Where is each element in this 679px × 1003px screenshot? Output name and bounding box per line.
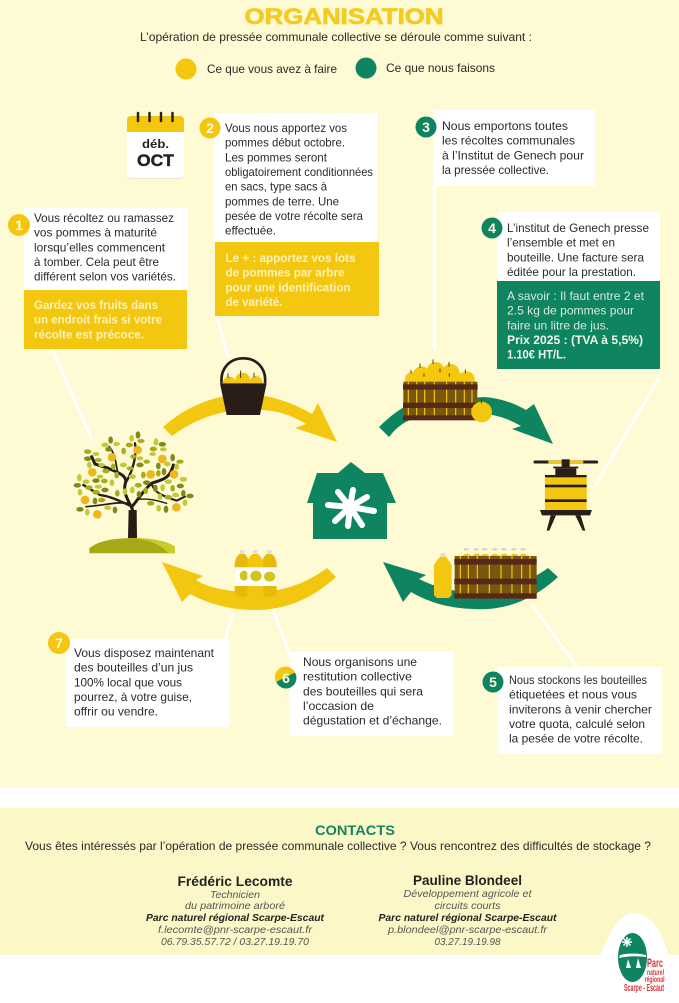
panel: step 2: de variété. bbox=[226, 295, 282, 309]
panel: step 5: étiquetées et nous vous bbox=[509, 688, 637, 702]
panel: step 1: 1 bbox=[15, 217, 23, 233]
panel: step 6 bbox=[275, 652, 453, 736]
panel: step 7 bbox=[48, 632, 229, 727]
contact: Frédéric Lecomte: du patrimoine arboré bbox=[185, 900, 285, 912]
arrow: green top right bbox=[379, 397, 553, 444]
icon: crate of bottles bbox=[434, 549, 537, 599]
panel: step 4: l’ensemble et met en bbox=[507, 236, 615, 250]
contact: Pauline Blondeel bbox=[378, 872, 557, 948]
panel: step 2: effectuée. bbox=[225, 224, 276, 238]
calendar icon bbox=[127, 113, 184, 179]
panel: step 2: pesée de votre récolte sera bbox=[225, 209, 363, 223]
panel: step 5: inviterons à venir chercher bbox=[509, 702, 652, 716]
logo: Parc naturel régional Scarpe-Escaut: régional bbox=[644, 975, 664, 984]
title: ORGANISATION bbox=[244, 4, 444, 29]
panel: step 4: faire un litre de jus. bbox=[507, 318, 609, 332]
icon: apple tree bbox=[74, 431, 194, 553]
contact: Frédéric Lecomte: 06.79.35.57.72 / 03.27.19.19.70 bbox=[161, 936, 309, 948]
panel: step 2: obligatoirement conditionnées bbox=[225, 165, 373, 179]
arrow: yellow top left bbox=[163, 396, 337, 442]
panel: step 4: A savoir : Il faut entre 2 et bbox=[507, 289, 645, 303]
panel: step 5: votre quota, calculé selon bbox=[509, 717, 645, 731]
icon: crate of apples bbox=[403, 359, 492, 422]
panel: step 7: des bouteilles d’un jus bbox=[74, 661, 193, 675]
logo: Parc naturel régional Scarpe-Escaut bbox=[600, 913, 669, 994]
panel: step 2: pommes début octobre. bbox=[225, 136, 345, 150]
panel: step 7: 100% local que vous bbox=[74, 675, 182, 689]
panel: step 7: Vous disposez maintenant bbox=[74, 646, 215, 660]
panel: step 7: offrir ou vendre. bbox=[74, 705, 158, 719]
contact: Frédéric Lecomte: Parc naturel régional Scarpe-Escaut bbox=[146, 912, 324, 924]
panel: step 4: Prix 2025 : (TVA à 5,5%) bbox=[507, 333, 643, 347]
panel: step 3 bbox=[416, 110, 595, 186]
panel: step 2: Vous nous apportez vos bbox=[225, 121, 347, 135]
contact: Frédéric Lecomte bbox=[146, 873, 324, 948]
contact: Frédéric Lecomte: Technicien bbox=[210, 889, 260, 901]
panel: step 6: 6 bbox=[282, 670, 290, 686]
panel: step 5: la pesée de votre récolte. bbox=[509, 732, 643, 746]
panel: step 6: dégustation et d’échange. bbox=[303, 714, 442, 728]
panel: step 4: éditée pour la prestation. bbox=[507, 265, 636, 279]
panel: step 4: L’institut de Genech presse bbox=[507, 221, 649, 235]
panel: step 6: l’occasion de bbox=[303, 699, 374, 713]
panel: step 1: lorsqu’elles commencent bbox=[34, 240, 166, 254]
icon: basket of apples bbox=[220, 358, 267, 415]
panel: step 3: 3 bbox=[422, 119, 430, 135]
panel: step 4: 4 bbox=[488, 220, 496, 236]
panel: step 2: pommes de terre. Une bbox=[225, 194, 339, 208]
panel: step 2 bbox=[200, 113, 379, 316]
contact: Frédéric Lecomte: f.lecomte@pnr-scarpe-escaut.fr bbox=[158, 924, 313, 936]
calendar icon: déb. bbox=[142, 137, 169, 151]
contacts heading: CONTACTS bbox=[315, 822, 395, 838]
panel: step 7: pourrez, à votre guise, bbox=[74, 690, 192, 704]
icon: fruit press bbox=[535, 459, 597, 531]
contacts question: Vous êtes intéressés par l’opération de pressée communale collective ? Vous rencontrez des difficultés de stockage ? bbox=[25, 839, 651, 853]
panel: step 3: les récoltes communales bbox=[442, 134, 575, 148]
panel: step 6: des bouteilles qui sera bbox=[303, 684, 423, 698]
panel: step 5 bbox=[482, 667, 662, 754]
contact: Pauline Blondeel: 03.27.19.19.98 bbox=[434, 936, 501, 948]
legend: Ce que nous faisons bbox=[386, 61, 495, 75]
panel: step 2: pour une identification bbox=[226, 280, 350, 294]
panel: step 1: différent selon vos variétés. bbox=[34, 270, 176, 284]
subtitle: L’opération de pressée communale collective se déroule comme suivant : bbox=[140, 30, 532, 44]
contact: Frédéric Lecomte: Frédéric Lecomte bbox=[178, 873, 293, 889]
panel: step 4: bouteille. Une facture sera bbox=[507, 250, 644, 264]
panel: step 1 bbox=[8, 208, 188, 349]
panel: step 5: 5 bbox=[489, 674, 497, 690]
legend bbox=[176, 58, 495, 80]
contact: Pauline Blondeel: circuits courts bbox=[434, 900, 501, 912]
panel: step 7: 7 bbox=[55, 635, 63, 651]
contact: Pauline Blondeel: Pauline Blondeel bbox=[413, 872, 522, 888]
panel: step 1: récolte est précoce. bbox=[34, 327, 144, 341]
panel: step 1: à tomber. Cela peut être bbox=[34, 255, 159, 269]
contact: Pauline Blondeel: p.blondeel@pnr-scarpe-escaut.fr bbox=[387, 924, 548, 936]
panel: step 3: la pressée collective. bbox=[442, 163, 549, 177]
icon: bottles of juice bbox=[235, 550, 277, 597]
logo: Parc naturel régional Scarpe-Escaut: naturel bbox=[647, 968, 664, 977]
panel: step 2: Les pommes seront bbox=[225, 150, 328, 164]
panel: step 4: 2.5 kg de pommes pour bbox=[507, 304, 634, 318]
panel: step 5: Nous stockons les bouteilles bbox=[509, 673, 647, 687]
contact: Pauline Blondeel: Parc naturel régional Scarpe-Escaut bbox=[378, 912, 557, 924]
panel: step 2: 2 bbox=[206, 120, 214, 136]
logo: Parc naturel régional Scarpe-Escaut: Parc bbox=[647, 956, 663, 970]
panel: step 1: Vous récoltez ou ramassez bbox=[34, 211, 174, 225]
arrow: yellow bottom left bbox=[162, 562, 336, 610]
panel: step 1: vos pommes à maturité bbox=[34, 226, 157, 240]
contact: Pauline Blondeel: Développement agricole et bbox=[404, 888, 533, 900]
panel: step 1: Gardez vos fruits dans bbox=[34, 298, 158, 312]
panel: step 4 bbox=[482, 212, 660, 369]
panel: step 6: Nous organisons une bbox=[303, 655, 417, 669]
panel: step 6: restitution collective bbox=[303, 670, 412, 684]
calendar icon: OCT bbox=[137, 151, 175, 170]
icon: park house bbox=[307, 462, 396, 539]
panel: step 2: en sacs, type sacs à bbox=[225, 180, 327, 194]
panel: step 3: Nous emportons toutes bbox=[442, 119, 568, 133]
connector lines bbox=[52, 186, 659, 667]
panel: step 4: 1.10€ HT/L. bbox=[507, 348, 566, 362]
legend: Ce que vous avez à faire bbox=[207, 62, 337, 76]
panel: step 2: de pommes par arbre bbox=[226, 266, 345, 280]
panel: step 2: Le + : apportez vos lots bbox=[226, 251, 356, 265]
panel: step 1: un endroit frais si votre bbox=[34, 313, 162, 327]
arrow: green bottom right bbox=[383, 562, 558, 609]
panel: step 3: à l’Institut de Genech pour bbox=[442, 148, 584, 162]
